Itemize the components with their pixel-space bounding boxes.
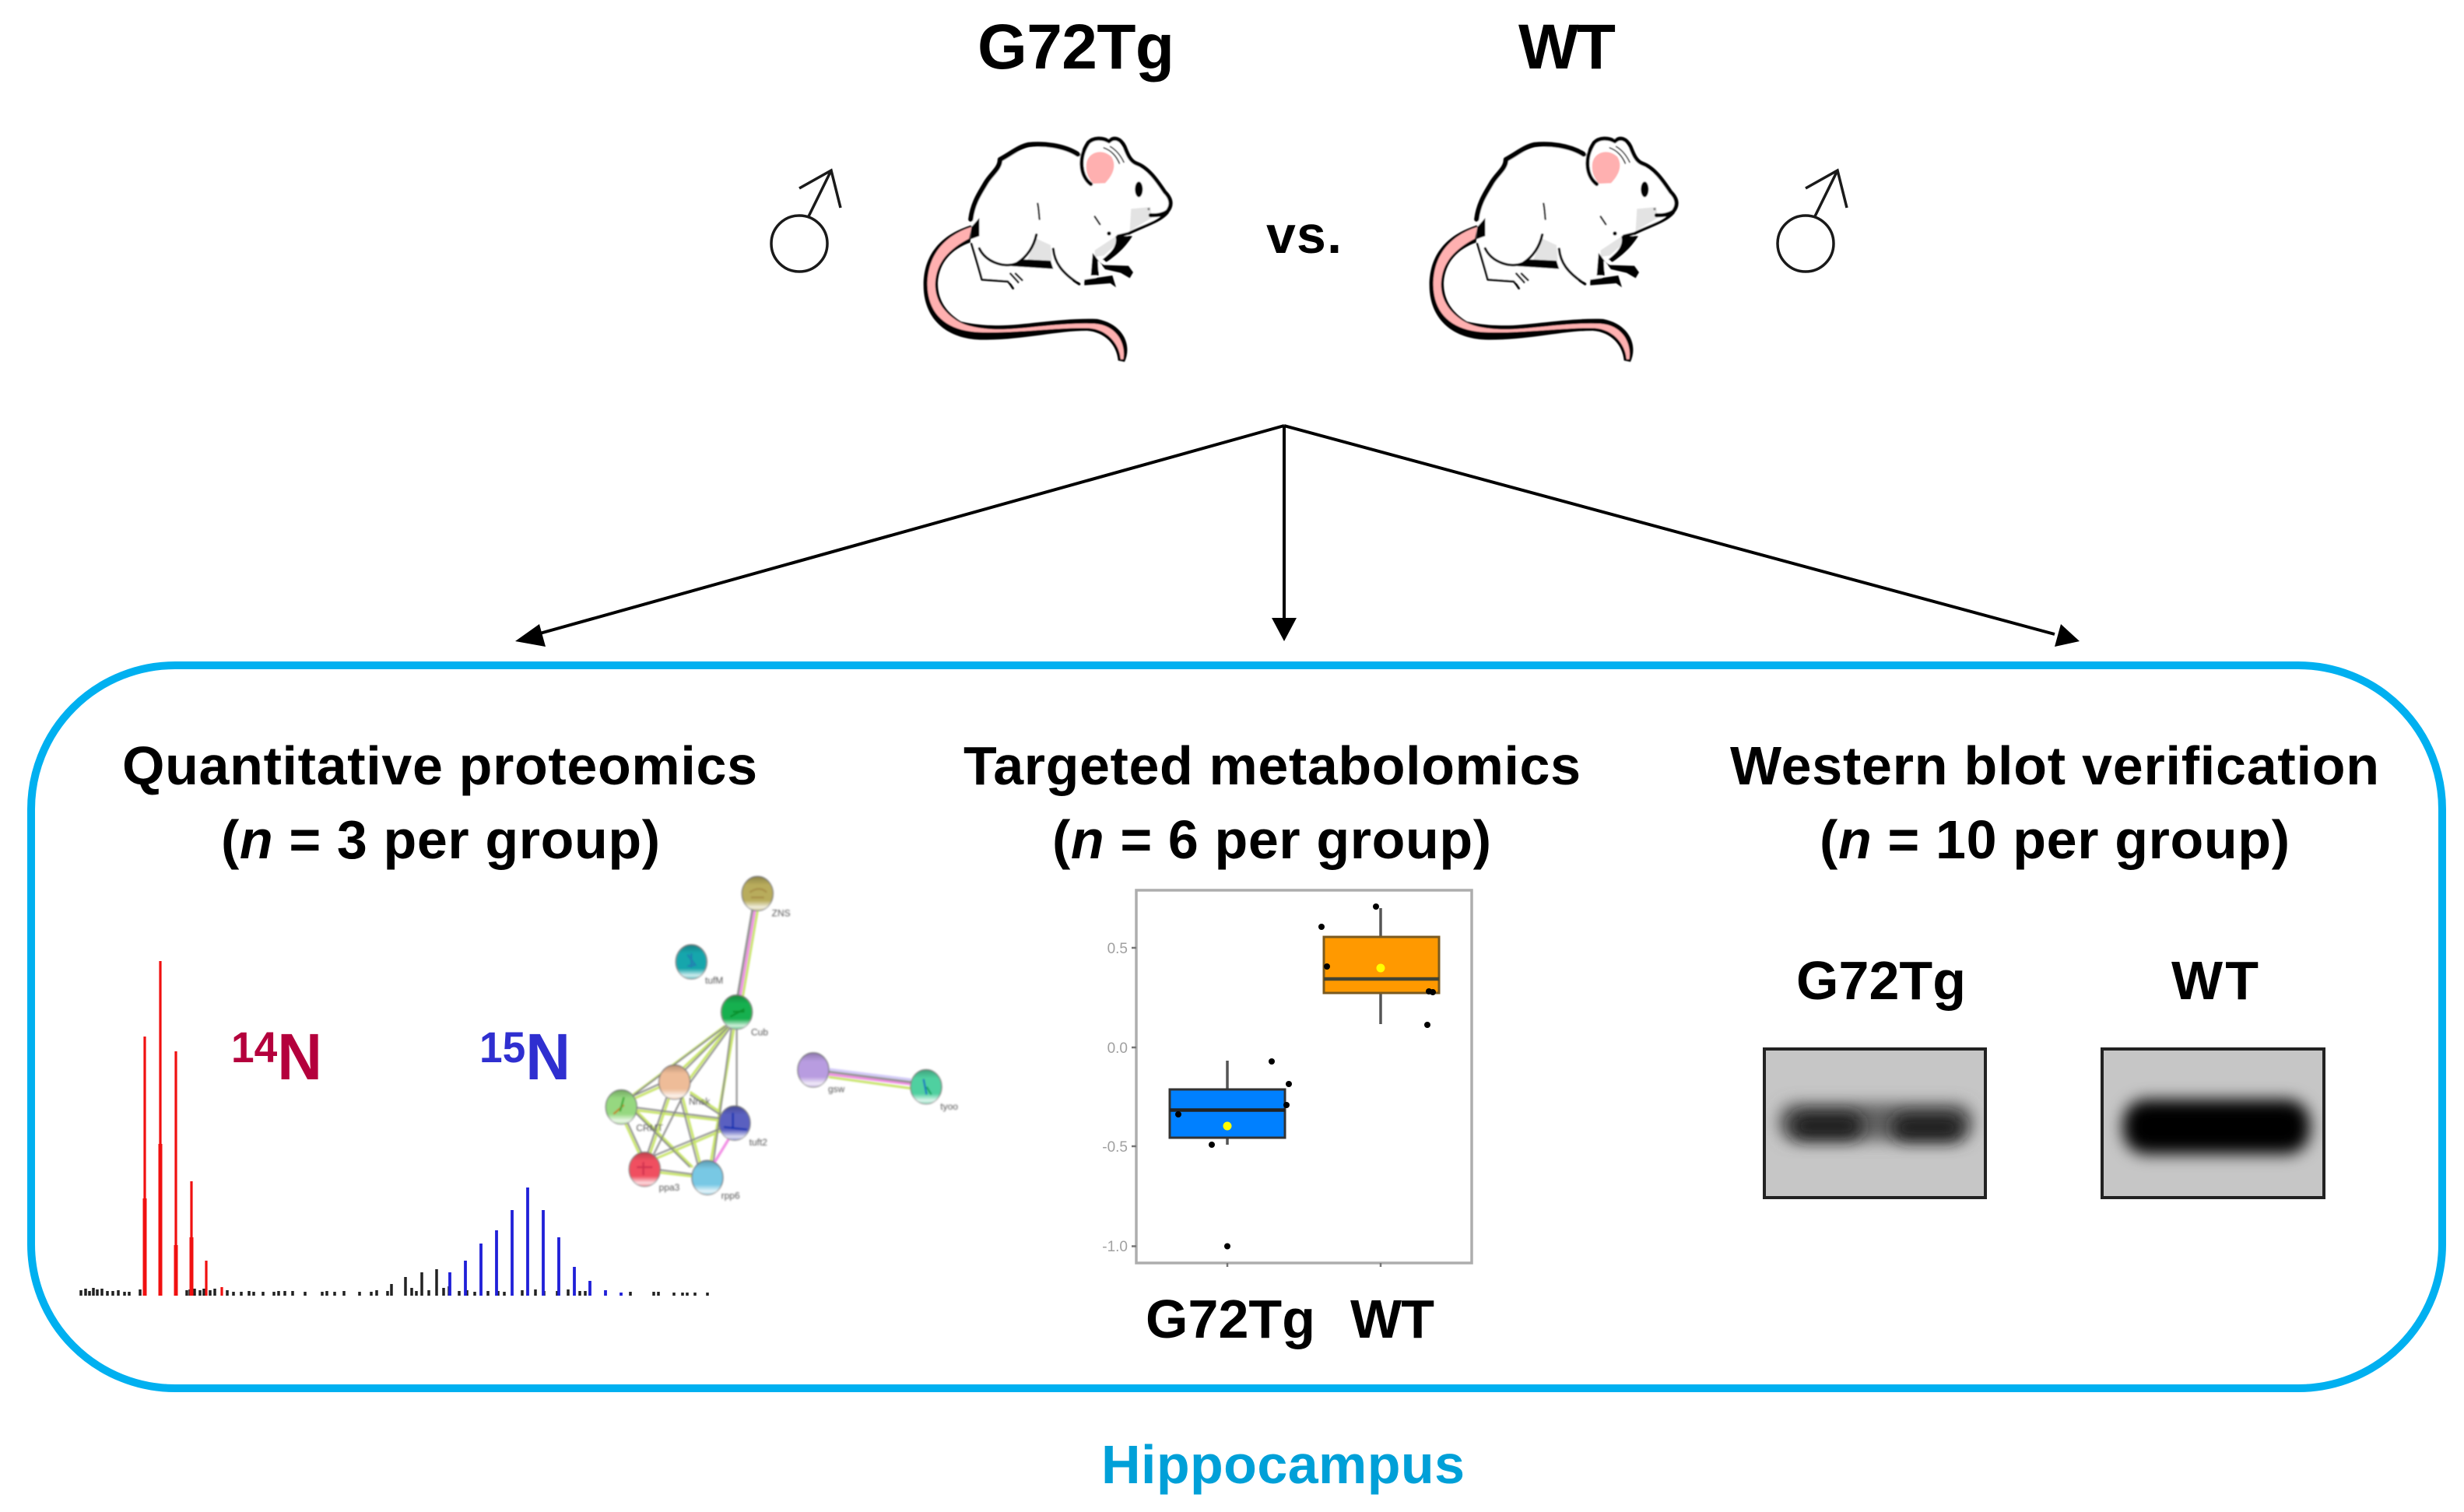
image: western blot band G72Tg — [1764, 1049, 1985, 1198]
chart: metabolomics box plot: 0.0 — [1107, 1040, 1128, 1057]
chart: metabolomics box plot: -0.5 — [1102, 1139, 1128, 1156]
bar: WT box — [1324, 937, 1439, 993]
heading: quantitative proteomics: (n = 3 per group) — [221, 809, 660, 870]
image: western blot band WT — [2102, 1049, 2324, 1198]
label: boxplot WT: WT — [1350, 1289, 1434, 1349]
caption: Hippocampus: Hippocampus — [1101, 1434, 1465, 1495]
chart: protein interaction network: tufM — [705, 975, 723, 986]
heading: WT mouse group: WT — [1518, 12, 1616, 82]
label: 15N: N — [525, 1020, 570, 1093]
chart: protein interaction network: rpp6 — [721, 1191, 740, 1202]
bar: G72Tg box — [1170, 1089, 1285, 1138]
icon: mouse G72Tg — [924, 138, 1171, 362]
icon: male symbol right — [1778, 170, 1847, 272]
chart: mass spectrum — [81, 961, 707, 1296]
panel: hippocampus analyses — [31, 665, 2442, 1388]
heading: quantitative proteomics — [122, 735, 757, 870]
heading: targeted metabolomics: Targeted metabolomics — [963, 735, 1581, 796]
chart: protein interaction network: ZNS — [772, 907, 791, 918]
chart: protein interaction network: tuft2 — [749, 1137, 767, 1148]
chart: metabolomics box plot: 0.5 — [1107, 941, 1128, 957]
chart: metabolomics box plot: -1.0 — [1102, 1239, 1128, 1255]
label: 15N: 15 — [479, 1023, 525, 1072]
label: vs.: vs. — [1266, 205, 1342, 265]
chart: protein interaction network: CRMT — [636, 1122, 664, 1133]
chart: protein interaction network: tyoo — [940, 1101, 958, 1112]
heading: western blot verification: (n = 10 per group) — [1820, 809, 2290, 870]
chart: protein interaction network: ppa3 — [659, 1182, 680, 1193]
label: western blot WT: WT — [2171, 950, 2259, 1011]
chart: protein interaction network: Nnsk — [689, 1096, 711, 1107]
heading: western blot verification: Western blot verification — [1730, 735, 2379, 796]
chart: protein interaction network: gsw — [828, 1083, 845, 1094]
chart: metabolomics box plot — [1102, 890, 1472, 1267]
arrows: from mice to three analyses — [515, 426, 2080, 647]
label: 14N: N — [277, 1020, 322, 1093]
heading: western blot verification — [1730, 735, 2379, 870]
chart: protein interaction network: Cub — [751, 1027, 768, 1038]
label: boxplot G72Tg: G72Tg — [1146, 1289, 1315, 1349]
heading: quantitative proteomics: Quantitative proteomics — [122, 735, 757, 796]
heading: targeted metabolomics: (n = 6 per group) — [1052, 809, 1491, 870]
label: 14N: 14 — [231, 1023, 277, 1072]
icon: male symbol left — [771, 170, 841, 272]
chart: protein interaction network — [605, 876, 958, 1202]
label: western blot G72Tg: G72Tg — [1796, 950, 1966, 1011]
icon: mouse WT — [1430, 138, 1676, 362]
heading: targeted metabolomics — [963, 735, 1581, 870]
heading: G72Tg mouse group: G72Tg — [978, 12, 1174, 82]
